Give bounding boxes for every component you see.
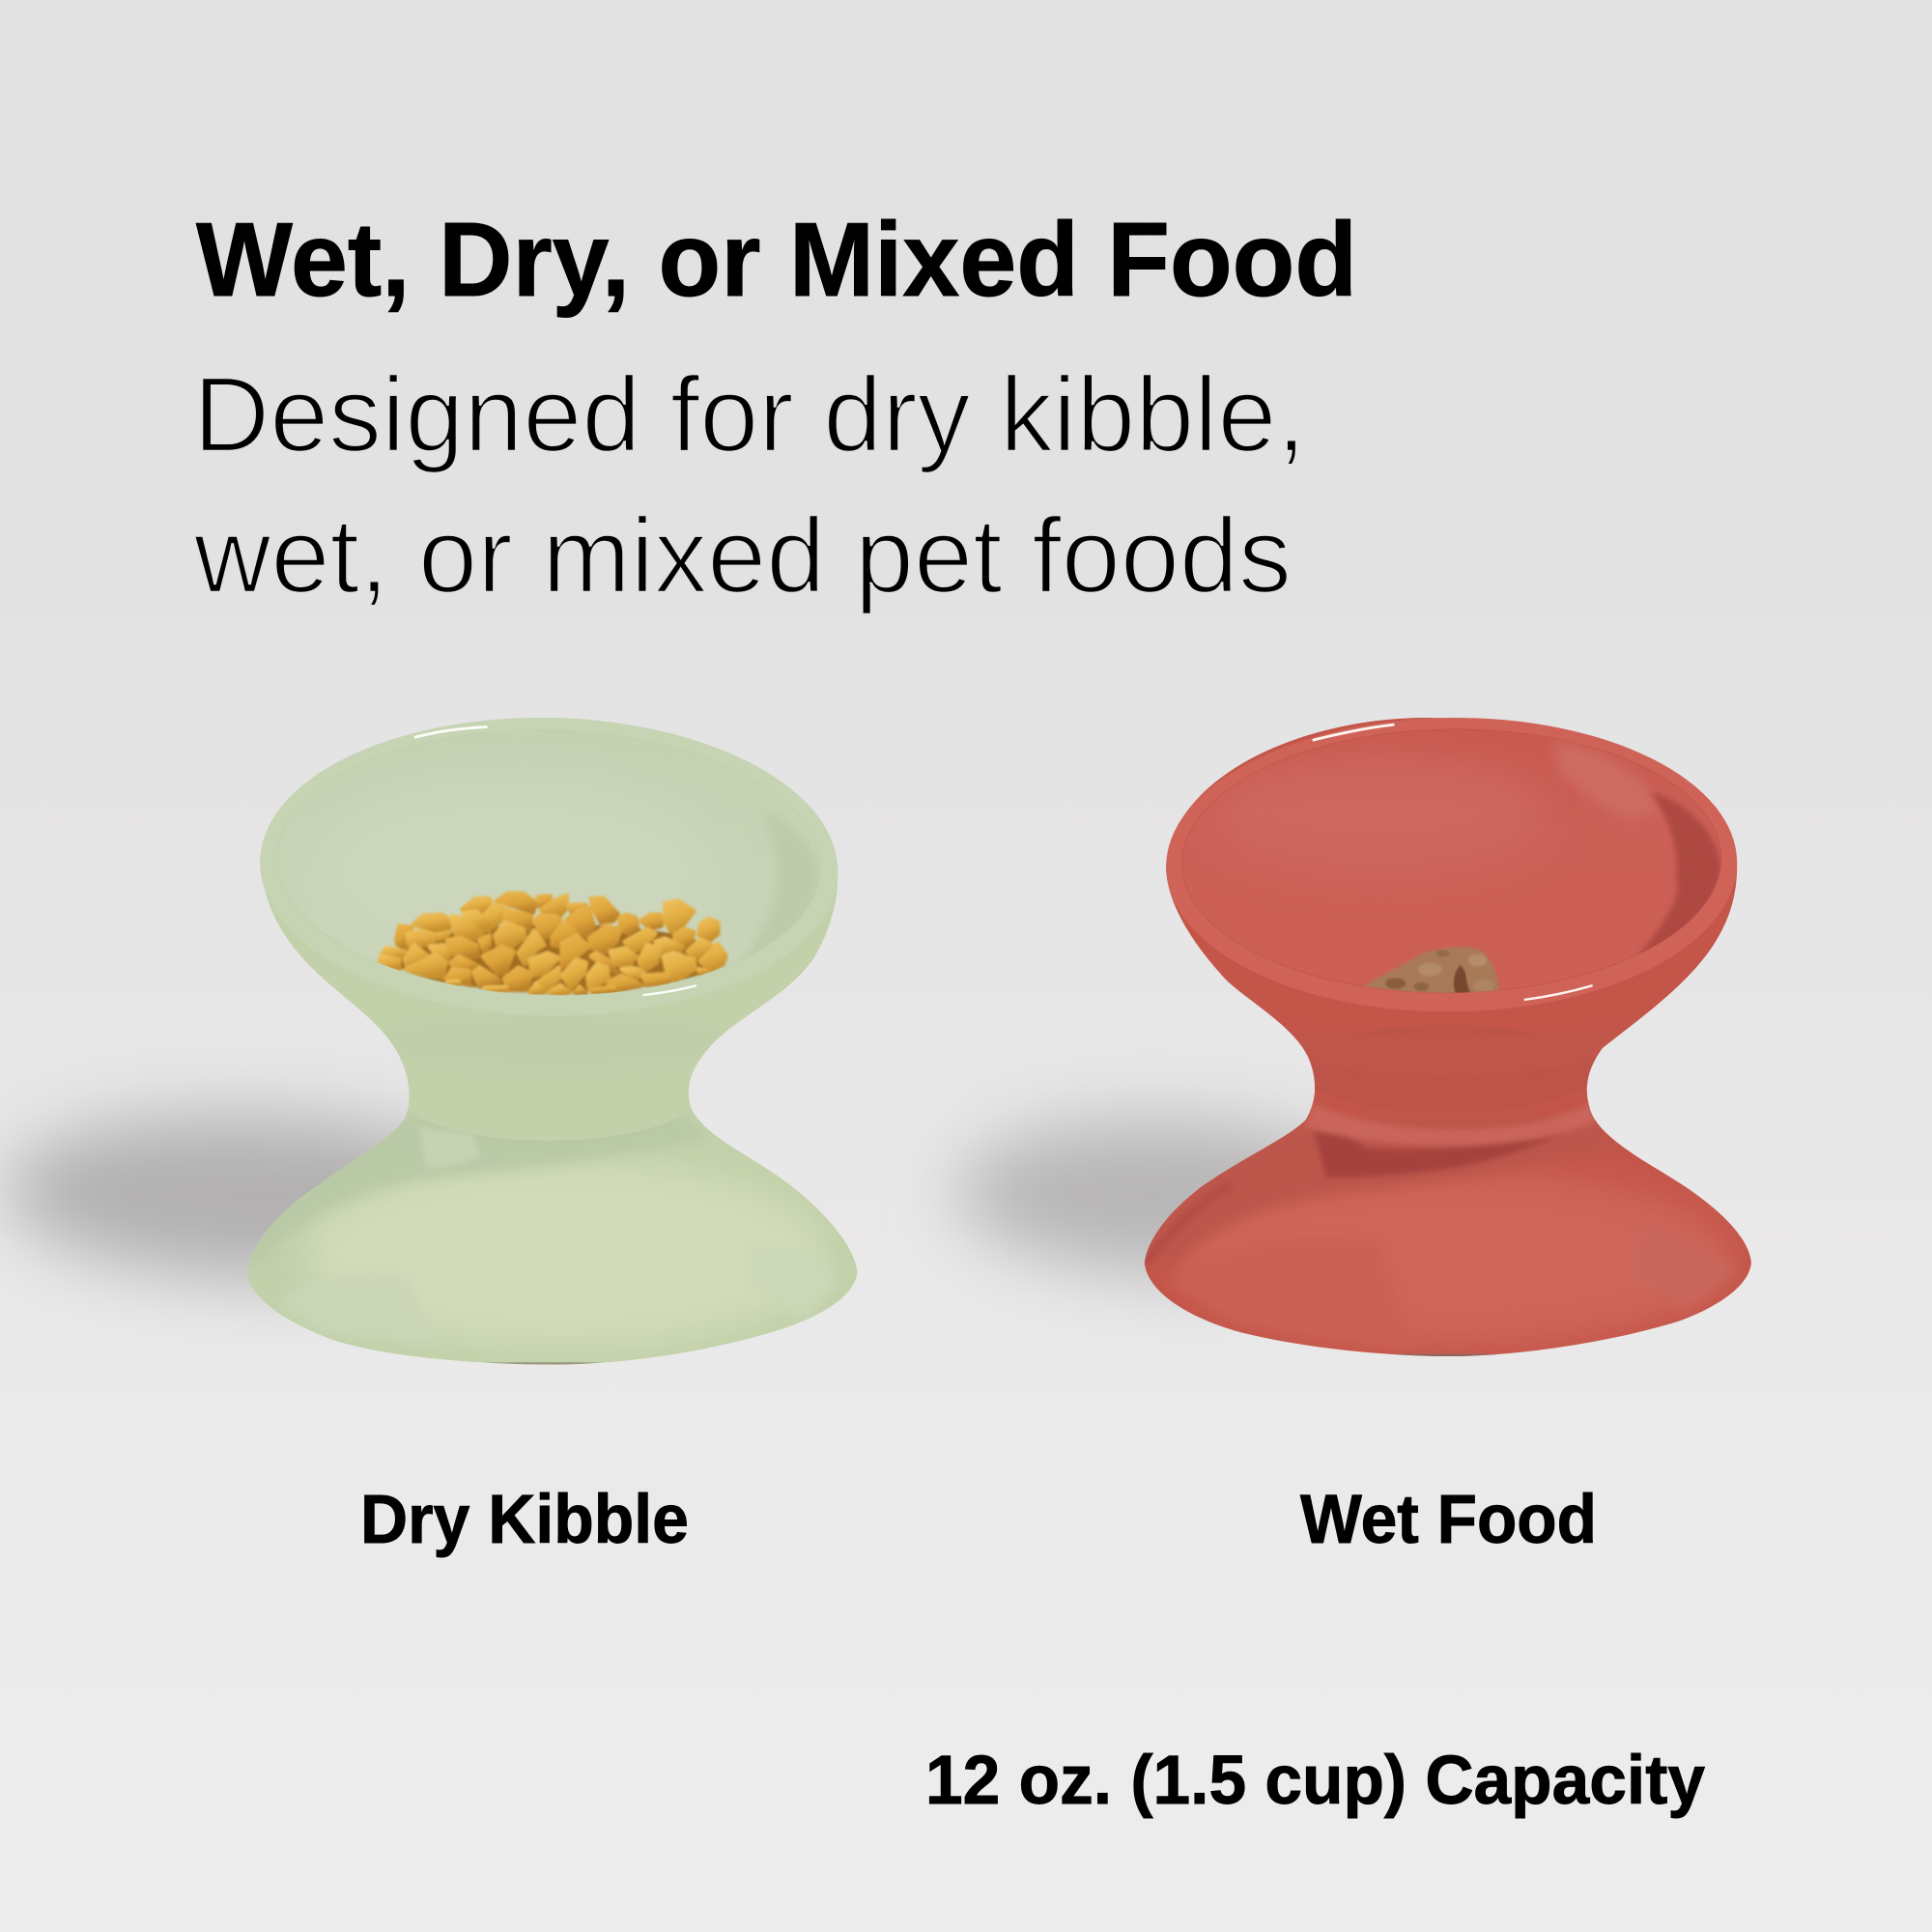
subtitle line 1: Designed for dry kibble,: [193, 355, 1306, 474]
label: wet food: Wet Food: [1300, 1482, 1597, 1558]
green rim highlights: [415, 727, 696, 995]
bowl: red with wet food: [1145, 715, 1751, 1366]
label: dry kibble: Dry Kibble: [360, 1482, 689, 1558]
green bowl body: [247, 718, 857, 1365]
bowl: green with dry kibble: [247, 712, 857, 1375]
title: Wet, Dry, or Mixed Food: [196, 201, 1357, 319]
kibble pile: [379, 894, 726, 994]
shadow: green bowl: [2, 1107, 520, 1289]
red bowl shading: [1146, 1025, 1736, 1366]
shadow: red bowl: [953, 1113, 1394, 1283]
red rim highlights: [1314, 724, 1592, 1000]
subtitle line 2: wet, or mixed pet foods: [193, 497, 1292, 615]
red rim lip: [1165, 715, 1738, 1014]
wet food lump: [1363, 947, 1499, 997]
red bowl body: [1145, 718, 1751, 1356]
red bowl interior: [1180, 726, 1722, 996]
green bowl shading: [259, 1039, 833, 1364]
green bowl interior: [274, 724, 823, 1001]
green rim lip: [258, 712, 840, 1021]
capacity note: 12 oz. (1.5 cup) Capacity: [925, 1743, 1705, 1819]
